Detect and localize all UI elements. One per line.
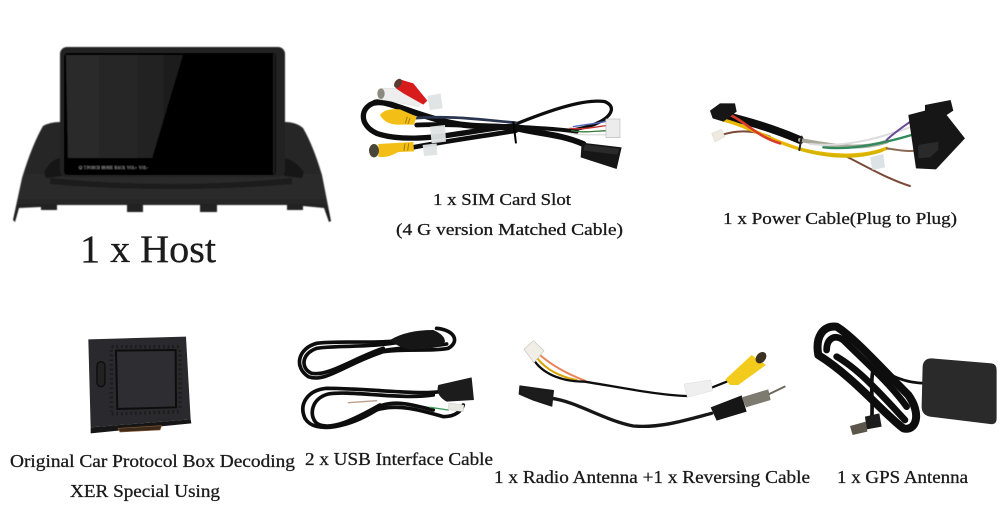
lower USB cable [303,377,474,427]
product: SIM card slot cable [363,77,622,169]
mounting bracket [13,122,331,222]
wire bundle [723,115,917,156]
label: 4G version cable: (4 G version Matched Cable) [396,220,623,239]
side pill [97,362,105,387]
label tag [870,154,885,170]
ISO plug [908,100,965,169]
reversing cable [524,341,769,397]
small white connector [712,129,725,142]
SMA connector [850,413,882,435]
cable labels [423,93,446,156]
screen glare [66,55,183,158]
small black plug [710,103,737,122]
label: GPS antenna: 1 x GPS Antenna [837,467,968,487]
wire tie [513,122,516,143]
upper yellow RCA plug [380,109,417,125]
box top face [88,337,191,427]
colored wires [570,121,610,135]
vent dots [111,347,180,414]
touch keys: ⏻ T PORCH HOME BACK VOL+ VOL- [79,166,149,170]
label: USB cable: 2 x USB Interface Cable [305,449,493,469]
label: radio antenna and reversing cable: 1 x Radio Antenna +1 x Reversing Cable [494,467,810,487]
red RCA plug [392,77,427,105]
product: radio antenna and reversing cable [519,341,785,426]
upper USB cable [299,328,455,378]
screen housing [60,47,285,177]
coiled cable [818,327,927,429]
bracket recess shading [44,158,304,178]
label: power cable: 1 x Power Cable(Plug to Plug) [723,209,957,228]
black cables [363,101,611,147]
display panel [64,53,276,175]
white multi-pin connector [606,119,620,138]
antenna puck [922,358,997,424]
product: protocol box [88,337,191,433]
connector [118,426,162,432]
label: protocol box line 1: Original Car Protocol Box Decoding [10,451,295,471]
radio antenna [519,386,785,426]
label: SIM card slot: 1 x SIM Card Slot [433,190,571,209]
brown wire [722,131,910,186]
product: power cable [710,100,965,186]
product: head unit host with bezel [13,47,331,222]
product: USB cables [299,328,474,427]
white RCA plug [377,88,425,107]
product: GPS antenna [818,327,997,435]
box front face [91,419,191,433]
label: host: 1 x Host [80,228,216,271]
lower yellow RCA plug [369,142,414,157]
center square [116,350,176,409]
label: protocol box line 2: XER Special Using [70,481,220,501]
SIM slot housing [581,143,622,169]
